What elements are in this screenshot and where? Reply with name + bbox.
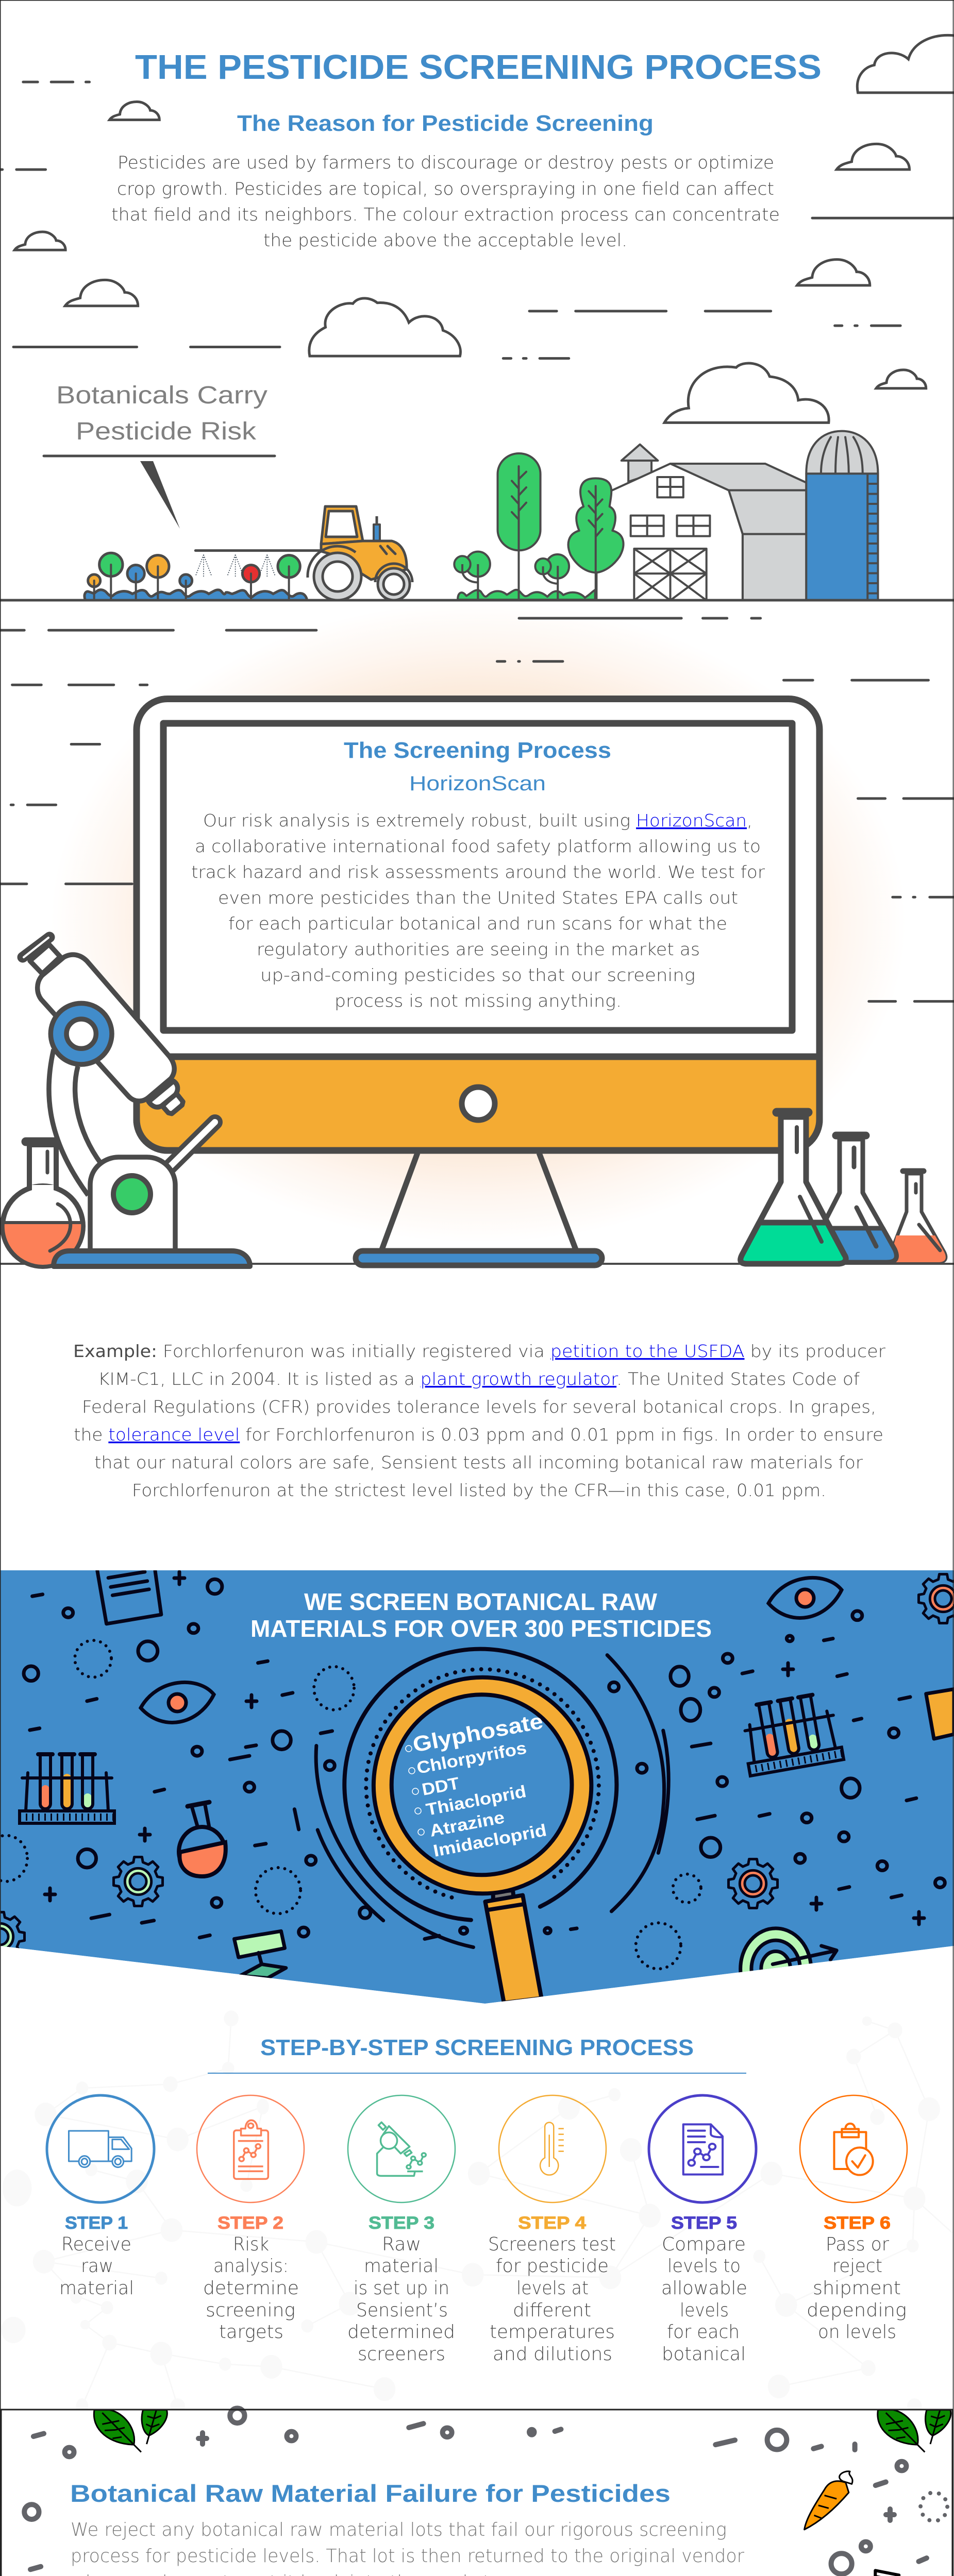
heading rule [208, 2073, 746, 2074]
grey doodles [3, 2408, 947, 2576]
pesticide list in lens: Imidacloprid [431, 1820, 548, 1860]
step 4 text [488, 2213, 616, 2365]
pesticide list in lens: Atrazine [428, 1807, 506, 1840]
screen text: track hazard and risk assessments around the world. We test for [191, 862, 765, 882]
step 4 text: Screeners test [488, 2234, 616, 2255]
title: THE PESTICIDE SCREENING PROCESS [135, 48, 822, 87]
step 5 text: levels [680, 2300, 729, 2321]
step 1 text: raw [81, 2256, 113, 2277]
flask, blue [804, 1136, 896, 1262]
crop plants and spray [85, 551, 321, 600]
pesticide list in lens: DDT [420, 1773, 461, 1799]
blue chevron panel [0, 1570, 954, 2004]
section: forchlorfenuron example paragraph: the tolerance level for Forchlorfenuron is 0.03 ppm and 0.01 ppm in figs. In order to ensure [74, 1425, 883, 1445]
step 2 text: analysis: [213, 2256, 289, 2277]
step 1 [47, 2095, 154, 2299]
screen text: even more pesticides than the United States EPA calls out [218, 888, 738, 908]
step 4 text: STEP 4 [518, 2213, 586, 2233]
step 6 text: STEP 6 [824, 2213, 891, 2233]
step 6 [800, 2095, 907, 2343]
molecule background pattern [1, 2011, 952, 2414]
step 2 text: determine [203, 2278, 299, 2299]
section: the reason for pesticide screening [0, 35, 954, 600]
dashes top [519, 617, 761, 619]
step 3 text: Raw [382, 2234, 421, 2255]
step 2 text: targets [219, 2321, 283, 2343]
plus signs [45, 1572, 924, 1924]
screen text: for each particular botanical and run scans for what the [228, 913, 727, 934]
step 5 text [661, 2213, 747, 2365]
section: botanical raw material failure [0, 2408, 952, 2576]
pesticide list in lens: Chlorpyrifos [415, 1738, 528, 1777]
magnifying glass [344, 1649, 616, 2003]
screen text: Our risk analysis is extremely robust, built using HorizonScan , [203, 810, 752, 831]
screen subheading: HorizonScan [409, 772, 546, 795]
step 4 text: temperatures [490, 2321, 615, 2343]
section: forchlorfenuron example paragraph: KIM-C1, LLC in 2004. It is listed as a plant growth regulator . The United States Code of [98, 1369, 860, 1389]
intro paragraph: crop growth. Pesticides are topical, so overspraying in one field can affect [117, 179, 774, 199]
step 5 text: STEP 5 [671, 2213, 737, 2233]
screen text [191, 810, 765, 1011]
step 2 text: STEP 2 [217, 2213, 283, 2233]
step 5 [649, 2095, 756, 2365]
step 4 text: levels at [516, 2278, 589, 2299]
step 2 text: screening [206, 2300, 295, 2321]
farm: trees, barn and silo [454, 431, 878, 600]
step 1 text: STEP 1 [65, 2213, 128, 2233]
step 4 text: and dilutions [493, 2344, 612, 2365]
step 4 text: different [513, 2300, 591, 2321]
step 4 [488, 2095, 616, 2365]
sky clouds and dashes [0, 35, 954, 422]
step 6 text: shipment [813, 2278, 901, 2299]
section: step-by-step screening process [1, 2011, 952, 2414]
callout: botanicals carry pesticide risk [44, 382, 275, 529]
round flask, left [3, 1142, 83, 1266]
section: forchlorfenuron example paragraph: Federal Regulations (CFR) provides tolerance levels for several botanical crops. In grapes, [82, 1397, 876, 1417]
paragraph: rejection: process for pesticide levels. That lot is then returned to the original vendor [71, 2546, 744, 2567]
flask, orange [889, 1171, 946, 1262]
pesticide list in lens: Glyphosate [411, 1709, 545, 1757]
list bullets [406, 1745, 424, 1835]
icon: clipboard chart [234, 2120, 268, 2179]
intro paragraph: that field and its neighbors. The colour extraction process can concentrate [111, 205, 780, 225]
sprayer, right [851, 2570, 941, 2576]
callout: botanicals carry pesticide risk: Botanicals Carry [56, 382, 267, 409]
step 1 text [59, 2213, 134, 2299]
step 5 text: Compare [662, 2234, 746, 2255]
step 2 text: Risk [233, 2234, 269, 2255]
flask icon [179, 1802, 226, 1876]
step 3 text: Sensient’s [356, 2300, 448, 2321]
subtitle: The Reason for Pesticide Screening [237, 111, 654, 136]
section: the screening process [0, 602, 954, 1266]
step 3 text [347, 2213, 455, 2365]
icon: clipboard check [834, 2124, 873, 2175]
step 3 text: screeners [358, 2344, 445, 2365]
plus signs [198, 2433, 946, 2576]
tractor [308, 506, 412, 600]
screen heading: The Screening Process [344, 738, 611, 763]
section: forchlorfenuron example paragraph: Example: Forchlorfenuron was initially registered via petition to the USFDA by its producer [73, 1341, 885, 1361]
section: forchlorfenuron example paragraph: that our natural colors are safe, Sensient tests all incoming botanical raw materials for [94, 1452, 863, 1472]
intro paragraph [111, 152, 780, 251]
steps heading: STEP-BY-STEP SCREENING PROCESS [260, 2035, 694, 2060]
paragraph: rejection: We reject any botanical raw material lots that fail our rigorous screening [71, 2519, 727, 2540]
section heading [252, 1593, 711, 1637]
section: over 300 pesticides [0, 1570, 954, 2009]
step 2 text [203, 2213, 299, 2343]
horizon dashes [0, 630, 954, 1002]
step 6 text: depending [807, 2300, 907, 2321]
pesticide list in lens [413, 1717, 546, 1857]
carrots [0, 2471, 852, 2576]
panel border [1, 2410, 952, 2576]
section heading: MATERIALS FOR OVER 300 PESTICIDES [250, 1615, 712, 1642]
leaves, top left [94, 2410, 167, 2452]
ground line [0, 1263, 954, 1265]
screen text: regulatory authorities are seeing in the market as [257, 939, 700, 959]
flask, green [741, 1112, 846, 1264]
step 5 text: allowable [661, 2278, 747, 2299]
intro paragraph: the pesticide above the acceptable level. [263, 230, 627, 251]
step 2 [197, 2095, 304, 2343]
microscope [23, 937, 250, 1266]
white panel background [1, 2410, 952, 2576]
icon: truck [69, 2131, 131, 2167]
step 3 text: is set up in [354, 2278, 449, 2299]
icon: report document [683, 2124, 723, 2175]
step 6 text [807, 2213, 907, 2343]
eye icons [141, 1578, 842, 1722]
section: forchlorfenuron example paragraph: Forchlorfenuron at the strictest level listed by the CFR—in this case, 0.01 ppm. [132, 1480, 826, 1500]
section: forchlorfenuron example paragraph [73, 1341, 885, 1500]
icon: microscope chart [377, 2122, 426, 2176]
step 5 text: for each [667, 2321, 740, 2343]
heading: Botanical Raw Material Failure for Pesticides [70, 2480, 671, 2507]
computer monitor [137, 699, 819, 1265]
test tube racks [20, 1691, 844, 1823]
step 3 text: determined [347, 2321, 455, 2343]
screen text: process is not missing anything. [334, 991, 622, 1011]
step 5 text: botanical [662, 2344, 746, 2365]
step 3 text: material [364, 2256, 439, 2277]
gears [0, 1574, 954, 1961]
step 6 text: on levels [818, 2321, 896, 2343]
step 1 text: Receive [61, 2234, 131, 2255]
step 1 text: material [59, 2278, 134, 2299]
background glow [51, 602, 906, 1243]
paragraph: rejection [71, 2519, 744, 2576]
step 3 [347, 2095, 455, 2365]
intro paragraph: Pesticides are used by farmers to discourage or destroy pests or optimize [118, 152, 774, 173]
ground line [0, 599, 954, 602]
step 5 text: levels to [667, 2256, 741, 2277]
step 4 text: for pesticide [496, 2256, 609, 2277]
pesticide list in lens: Thiacloprid [424, 1782, 528, 1819]
step 3 text: STEP 3 [369, 2213, 434, 2233]
step 6 text: reject [832, 2256, 882, 2277]
doodles [0, 1571, 954, 2009]
leaves, top right [878, 2410, 951, 2452]
icon: thermometer [540, 2123, 564, 2175]
screen text: a collaborative international food safety platform allowing us to [195, 836, 761, 856]
section heading: WE SCREEN BOTANICAL RAW [304, 1588, 658, 1615]
step 6 text: Pass or [826, 2234, 889, 2255]
callout: botanicals carry pesticide risk: Pesticide Risk [76, 418, 257, 445]
screen text: up-and-coming pesticides so that our screening [260, 965, 695, 985]
